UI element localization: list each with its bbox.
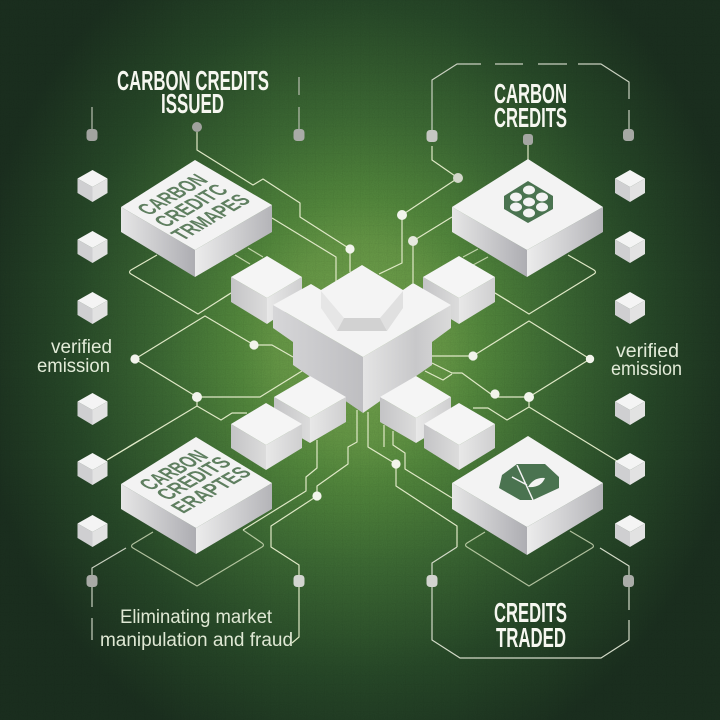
satellite cube: lower left front bbox=[231, 403, 302, 470]
block text: carbon credits eraptes: ERAPTES bbox=[165, 463, 257, 517]
short lines top-left cube bbox=[220, 248, 263, 300]
satellite cube: upper left bbox=[231, 256, 302, 324]
central hub bbox=[273, 265, 451, 413]
block: bottom-left bbox=[121, 437, 272, 554]
lines: below core bbox=[243, 412, 457, 547]
text: verified emission right bbox=[611, 341, 682, 380]
title: credits traded bbox=[494, 597, 567, 653]
satellite cube: lower right front bbox=[424, 403, 495, 470]
line: top-left block to core bbox=[272, 218, 336, 282]
diamond under top-left block bbox=[130, 255, 231, 314]
line: top-right centre stem bbox=[527, 145, 529, 160]
text: verified emission left: verified bbox=[51, 337, 112, 358]
line: top-right dashed frame bbox=[432, 64, 629, 136]
block: top-left bbox=[121, 160, 272, 277]
line: bottom-left stubs bbox=[92, 548, 126, 640]
text: verified emission left bbox=[37, 337, 112, 377]
text: verified emission right: verified bbox=[616, 341, 679, 362]
line: right big diamond bbox=[425, 321, 590, 397]
satellite cube: lower left rear bbox=[274, 376, 346, 443]
line: bottom-left to fraud text bbox=[271, 410, 357, 643]
small cubes: left column bbox=[78, 170, 108, 547]
text: eliminating market: manipulation and fraud bbox=[100, 630, 293, 651]
line: top-left connector bbox=[197, 132, 350, 272]
satellite cube: lower right rear bbox=[380, 376, 451, 443]
text: eliminating market bbox=[100, 607, 293, 651]
title: credits traded: TRADED bbox=[496, 622, 566, 653]
title: carbon credits bbox=[494, 78, 567, 133]
connector nodes bbox=[86, 122, 634, 587]
block text: carbon credit trapes: TRMAPES bbox=[165, 190, 256, 244]
text: eliminating market: Eliminating market bbox=[120, 607, 273, 628]
icon: leaf in octagon bbox=[499, 464, 559, 500]
line: left big diamond bbox=[135, 316, 302, 397]
line: top-right connector bbox=[379, 146, 458, 274]
title: carbon credits: CARBON bbox=[494, 78, 567, 109]
line: bottom-right frame bbox=[432, 547, 629, 658]
small cubes: right column bbox=[615, 170, 645, 547]
node: hex terminals bbox=[86, 122, 634, 587]
block text: carbon credits eraptes bbox=[133, 446, 257, 517]
text: verified emission left: emission bbox=[37, 356, 110, 377]
block: top-right bbox=[452, 159, 603, 277]
block text: carbon credit trapes: CREDITC bbox=[148, 180, 234, 231]
line: top-left stubs bbox=[92, 77, 299, 130]
line: right lower bbox=[473, 397, 617, 461]
title: carbon credits issued bbox=[117, 65, 269, 119]
block text: carbon credits eraptes: CREDITS bbox=[150, 453, 237, 504]
satellite cube: upper right bbox=[423, 256, 495, 324]
diamond under top-right block bbox=[495, 255, 596, 314]
circuit lines bbox=[92, 64, 629, 658]
node: circles bbox=[130, 173, 594, 501]
line: top-right block to core bbox=[413, 217, 452, 283]
diamond under bottom-right block bbox=[466, 531, 594, 586]
title: credits traded: CREDITS bbox=[494, 597, 567, 628]
line: left lower bbox=[107, 397, 247, 460]
text: verified emission right: emission bbox=[611, 359, 682, 380]
icon: hexagon of cells bbox=[504, 181, 553, 223]
block text: carbon credit trapes: CARBON bbox=[131, 170, 214, 219]
title: carbon credits issued: ISSUED bbox=[161, 88, 224, 119]
hub recess bbox=[321, 291, 403, 331]
block text: carbon credits eraptes: CARBON bbox=[133, 446, 214, 494]
block: bottom-right bbox=[452, 436, 603, 555]
line: left cube connector bbox=[107, 440, 140, 460]
block text: carbon credit trapes bbox=[131, 170, 256, 244]
short lines top-right cube bbox=[463, 249, 510, 302]
diamond under bottom-left block bbox=[132, 530, 264, 586]
title: carbon credits issued: CARBON CREDITS bbox=[117, 65, 269, 96]
title: carbon credits: CREDITS bbox=[494, 102, 567, 133]
